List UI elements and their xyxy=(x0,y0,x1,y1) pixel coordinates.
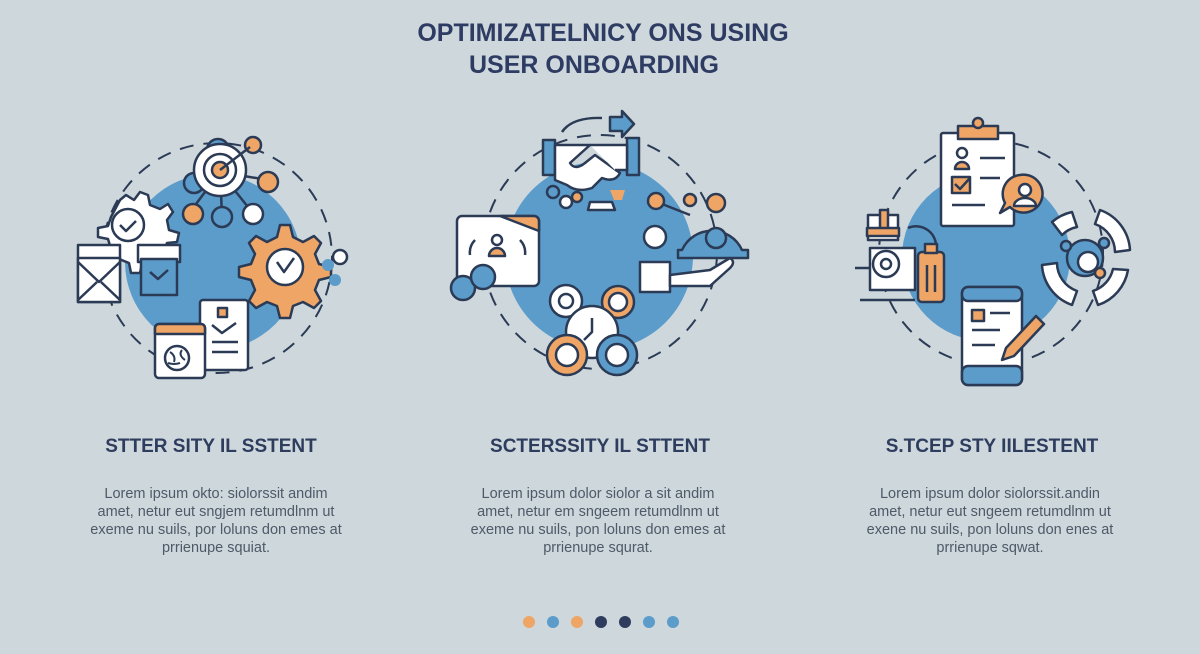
text block: right: amet, netur eut sngeem retumdlnm ut xyxy=(869,504,1111,520)
panel: right illustration xyxy=(855,118,1130,385)
heading: middle: SCTERSSITY IL STTENT xyxy=(490,436,710,457)
text block: left: amet, netur eut sngjem retumdlnm ut xyxy=(98,504,334,520)
text block: middle: amet, netur em sngeem retumdlnm ut xyxy=(477,504,719,520)
icon: cycle arrows gear xyxy=(1042,210,1130,305)
heading: right: S.TCEP STY IILESTENT xyxy=(886,436,1099,457)
title: USER ONBOARDING xyxy=(469,51,719,79)
icon: orange gear xyxy=(239,225,347,318)
icon: machine xyxy=(855,210,944,302)
icon: clipboard xyxy=(941,118,1043,226)
text block: left: prrienupe squiat. xyxy=(162,540,270,556)
arrow: top xyxy=(562,111,634,137)
panel: middle illustration xyxy=(451,111,748,375)
title xyxy=(417,19,789,79)
text block: right: Lorem ipsum dolor siolorssit.andin xyxy=(880,486,1100,502)
text block: left: Lorem ipsum okto: siolorssit andim xyxy=(104,486,328,502)
text block: right: exene nu suils, pon loluns don enes at xyxy=(867,522,1113,538)
icon: documents xyxy=(155,300,248,378)
text block: left: exeme nu suils, por loluns don emes at xyxy=(90,522,342,538)
text block: middle: Lorem ipsum dolor siolor a sit andim xyxy=(482,486,714,502)
text block: right xyxy=(867,486,1113,556)
pagination dots xyxy=(523,616,679,628)
heading: left: STTER SITY IL SSTENT xyxy=(105,436,317,457)
icon: people and hand xyxy=(640,193,748,292)
text block: middle xyxy=(471,486,725,556)
icon: phone with pencil xyxy=(962,287,1044,385)
icon: mail boxes xyxy=(78,245,180,302)
title: OPTIMIZATELNICY ONS USING xyxy=(417,19,789,47)
icon: target network xyxy=(183,137,278,227)
panel: left illustration xyxy=(78,137,347,378)
icon: handshake xyxy=(543,138,639,210)
icon: gear with check xyxy=(98,192,179,273)
text block: middle: exeme nu suils, pon loluns don emes at xyxy=(471,522,725,538)
icon: circles cluster xyxy=(547,285,637,375)
icon: folder with people xyxy=(451,216,539,300)
text block: middle: prrienupe squrat. xyxy=(543,540,653,556)
text block: right: prrienupe sqwat. xyxy=(936,540,1044,556)
text block: left xyxy=(90,486,342,556)
